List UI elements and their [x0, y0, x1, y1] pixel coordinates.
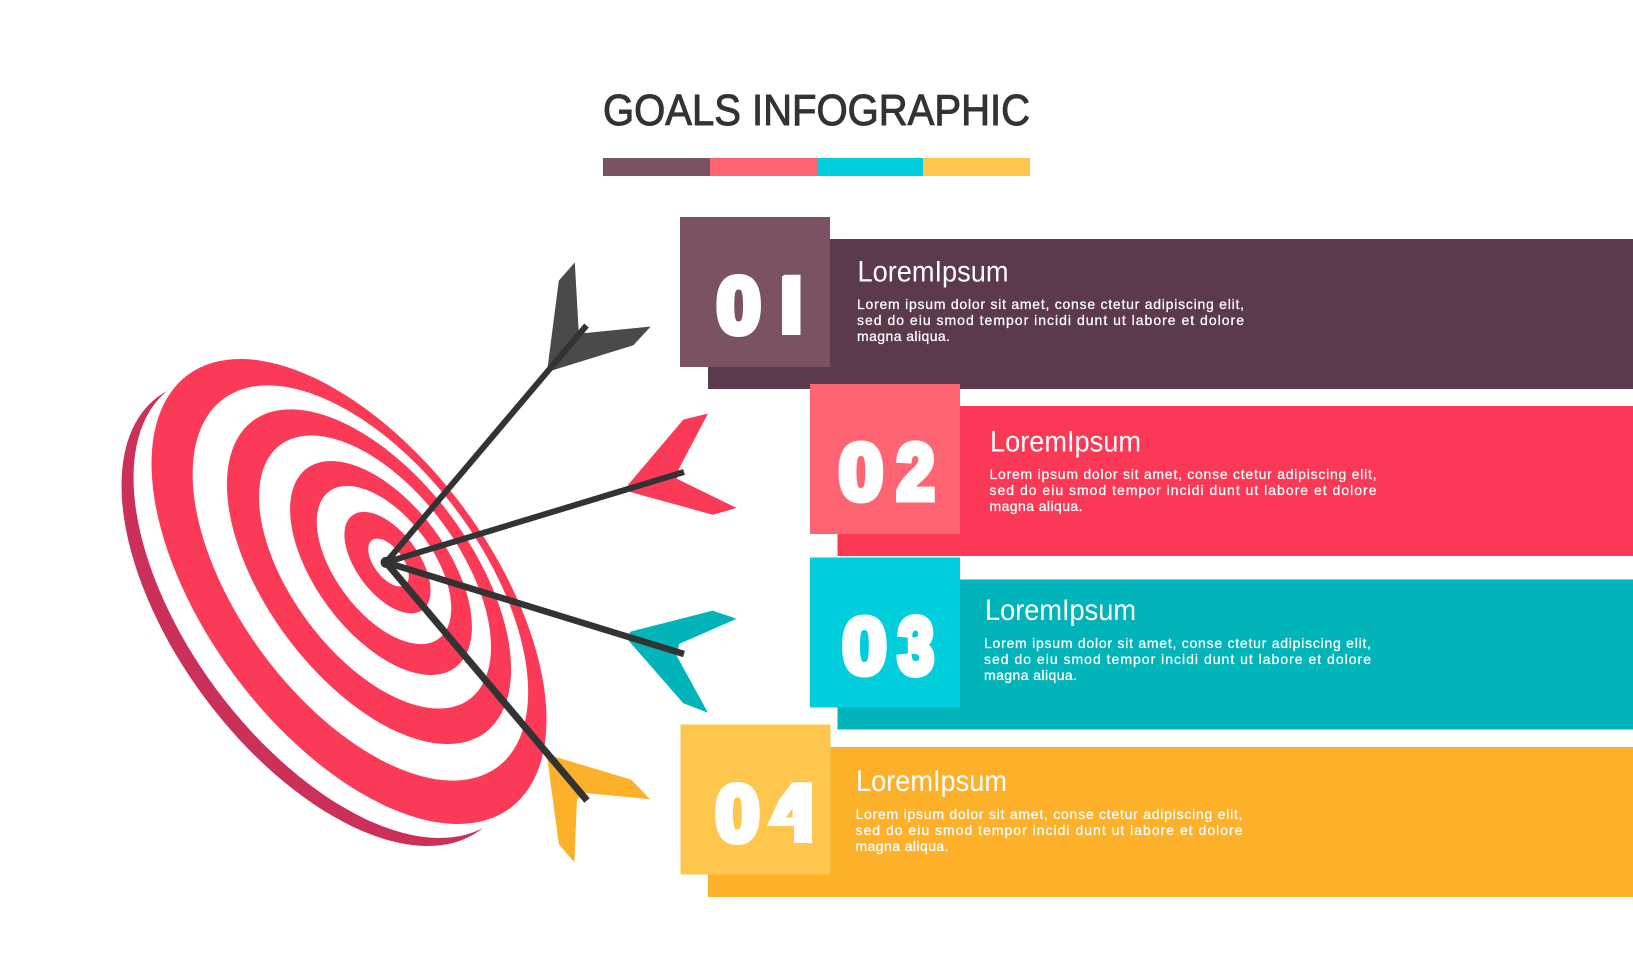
body text 01	[857, 296, 1244, 344]
body text 02: magna aliqua.	[990, 498, 1082, 514]
number 04: 4	[767, 769, 817, 858]
body text 01: Lorem ipsum dolor sit amet, conse ctetur adipiscing elit,	[857, 296, 1244, 312]
body text 04: Lorem ipsum dolor sit amet, conse ctetur adipiscing elit,	[856, 806, 1242, 822]
band 02	[838, 406, 1633, 556]
body text 02: sed do eiu smod tempor incidi dunt ut labore et dolore	[990, 482, 1377, 498]
number 01	[716, 274, 800, 337]
number 02	[839, 427, 934, 516]
target board	[44, 290, 624, 915]
panel 01	[680, 217, 1633, 389]
number 03: 3	[898, 602, 934, 691]
body text 02: Lorem ipsum dolor sit amet, conse ctetur adipiscing elit,	[990, 466, 1376, 482]
number 01: 1	[767, 262, 811, 350]
body text 04	[856, 806, 1243, 854]
band 03	[838, 580, 1633, 730]
heading 02: LoremIpsum	[990, 426, 1141, 459]
body text 04: magna aliqua.	[856, 838, 948, 854]
arrow 4: orange	[386, 562, 650, 862]
body text 03: Lorem ipsum dolor sit amet, conse ctetur adipiscing elit,	[984, 635, 1371, 651]
band 01	[708, 239, 1633, 389]
panel 04	[680, 724, 1633, 897]
arrow tips at bullseye	[380, 557, 392, 568]
number box 03	[810, 558, 960, 708]
body text 01: magna aliqua.	[857, 328, 950, 344]
number 02: 2	[897, 427, 934, 516]
panel 03	[810, 558, 1633, 730]
number 03: 0	[843, 601, 886, 690]
target rings	[74, 290, 624, 893]
arrow 3: teal	[386, 562, 737, 713]
arrow 1: grey	[386, 262, 651, 562]
heading 04: LoremIpsum	[856, 765, 1007, 798]
number 04	[715, 782, 812, 845]
body text 04: sed do eiu smod tempor incidi dunt ut labore et dolore	[856, 822, 1243, 838]
panel 02	[810, 384, 1633, 556]
number 01: 0	[717, 260, 761, 350]
heading 01: LoremIpsum	[858, 256, 1008, 289]
title: GOALS INFOGRAPHIC	[603, 86, 1030, 135]
body text 03: sed do eiu smod tempor incidi dunt ut labore et dolore	[984, 651, 1371, 667]
number box 01	[680, 217, 830, 367]
arrow 2: red	[386, 414, 737, 562]
band 04	[708, 747, 1633, 897]
body text 03: magna aliqua.	[984, 667, 1077, 683]
body text 02	[990, 466, 1377, 514]
colour bar under title	[603, 158, 1030, 176]
number 02: 0	[839, 427, 883, 516]
number box 02	[810, 384, 960, 534]
infographic canvas	[122, 94, 1633, 897]
number 03	[843, 601, 934, 691]
number box 04	[680, 724, 830, 874]
number 04: 0	[716, 768, 759, 858]
heading 03: LoremIpsum	[985, 594, 1136, 627]
target rim	[44, 304, 606, 915]
body text 03	[984, 635, 1371, 683]
body text 01: sed do eiu smod tempor incidi dunt ut labore et dolore	[857, 312, 1244, 328]
